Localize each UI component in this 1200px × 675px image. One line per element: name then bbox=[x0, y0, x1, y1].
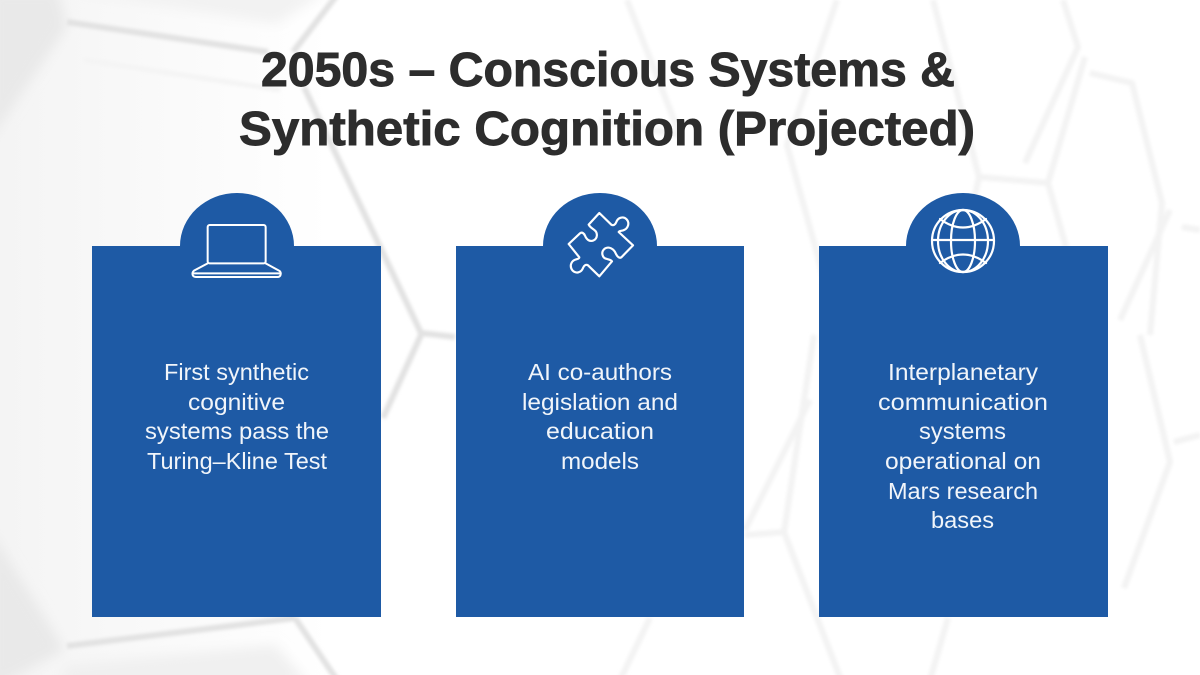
panel: card 2 bbox=[456, 193, 744, 617]
text: card 1: cognitive bbox=[188, 389, 285, 415]
icon: puzzle piece bbox=[569, 213, 633, 276]
text: card 2: models bbox=[561, 448, 639, 474]
text: card 2 bbox=[522, 359, 678, 474]
card body with dome bbox=[92, 193, 381, 617]
text: card 2: AI co-authors bbox=[528, 359, 672, 385]
title: Synthetic Cognition (Projected) bbox=[239, 103, 975, 156]
title bbox=[239, 44, 975, 156]
panel: card 3 bbox=[819, 193, 1108, 617]
icon: laptop bbox=[192, 225, 281, 277]
text: card 1: First synthetic bbox=[164, 359, 309, 385]
text: card 3: operational on bbox=[885, 448, 1041, 474]
text: card 1: systems pass the bbox=[145, 418, 329, 444]
text: card 1 bbox=[145, 359, 329, 474]
card body with dome bbox=[819, 193, 1108, 617]
text: card 3 bbox=[878, 359, 1048, 533]
text: card 3: communication bbox=[878, 389, 1048, 415]
text: card 2: legislation and bbox=[522, 389, 678, 415]
panel: card 1 bbox=[92, 193, 381, 617]
text: card 2: education bbox=[546, 418, 654, 444]
card body with dome bbox=[456, 193, 744, 617]
text: card 3: bases bbox=[931, 507, 994, 533]
icon: globe bbox=[932, 210, 994, 272]
text: card 3: Interplanetary bbox=[888, 359, 1039, 385]
text: card 1: Turing–Kline Test bbox=[147, 448, 328, 474]
text: card 3: Mars research bbox=[888, 478, 1038, 504]
title: 2050s – Conscious Systems & bbox=[261, 44, 955, 97]
text: card 3: systems bbox=[919, 418, 1006, 444]
